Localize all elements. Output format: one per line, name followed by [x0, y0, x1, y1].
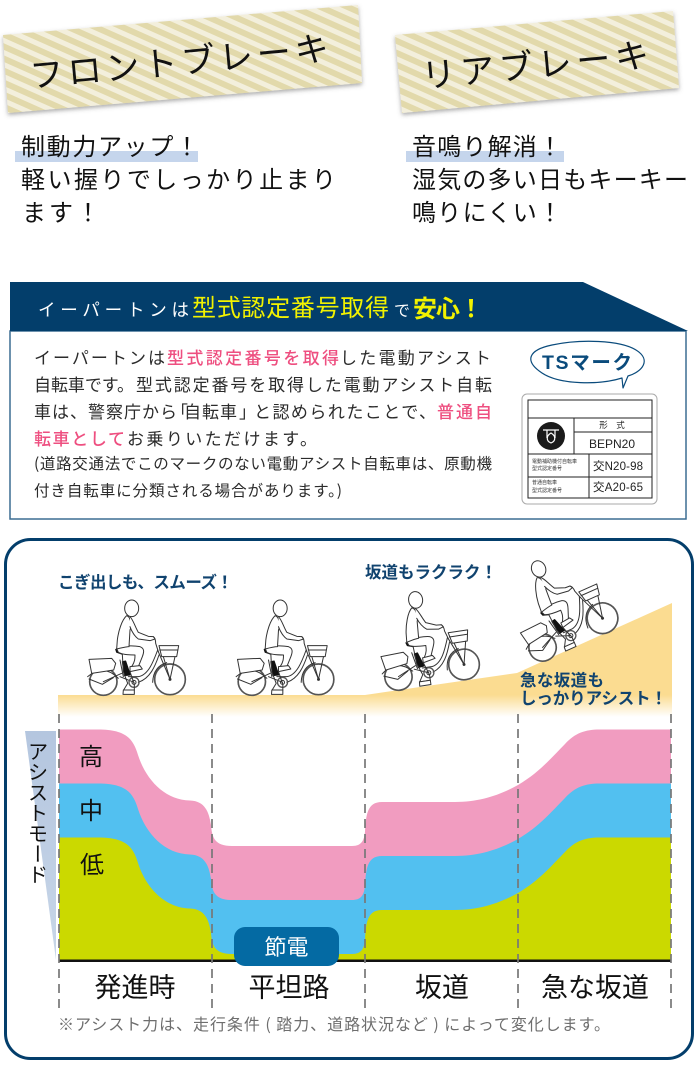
heading: 型式認定番号取得	[192, 288, 389, 323]
axis labels: 平坦路	[248, 966, 330, 1005]
label tape: front brake	[3, 5, 362, 113]
body text: 転車として	[34, 425, 125, 450]
axis labels	[94, 966, 649, 1005]
TS mark sticker: 電動補助機付自転車	[532, 458, 577, 465]
speech bubble: TS mark: TSマーク	[542, 352, 632, 374]
heading: イーパートンは	[38, 297, 189, 322]
heading: で	[394, 297, 410, 321]
label tape: rear brake: リアブレーキ	[419, 28, 651, 98]
panel: rear brake	[395, 11, 688, 228]
illustration: rider at start	[88, 600, 185, 695]
body text: 型式認定番号を取得した電動アシスト自転	[136, 371, 492, 396]
highlight: rear brake	[406, 151, 564, 162]
TS mark sticker: 交A20-65	[593, 481, 643, 494]
axis: assist mode: アシストモード	[23, 741, 53, 884]
badge: power saving	[234, 927, 339, 966]
badge: power saving: 節電	[264, 930, 309, 962]
heading: 安心！	[413, 289, 483, 324]
callout: slope: 坂道もラクラク！	[365, 559, 497, 583]
panel: front brake	[3, 5, 362, 228]
panel: type approval	[10, 282, 688, 519]
emblem	[537, 422, 565, 450]
body text: 「	[171, 398, 188, 423]
highlight: front brake	[15, 151, 198, 162]
axis: assist mode	[23, 731, 56, 960]
label tape: front brake: フロントブレーキ	[27, 21, 331, 98]
body text: 型式認定番号を取得	[167, 344, 339, 369]
body text: お乗りいただけます。	[127, 425, 317, 450]
panel: assist mode	[6, 540, 692, 1058]
speech bubble: TS mark	[531, 341, 644, 388]
TS mark sticker: BEPN20	[589, 437, 635, 451]
body text	[34, 344, 492, 501]
callout: start: こぎ出しも、スムーズ！	[58, 569, 233, 593]
band: middle	[59, 784, 671, 960]
label tape: rear brake	[395, 11, 679, 113]
panel border	[10, 331, 686, 519]
body text: (道路交通法でこのマークのない電動アシスト自転車は、原動機	[34, 452, 492, 474]
callout: steep slope: しっかりアシスト！	[520, 685, 667, 709]
body text: 自転車です。	[34, 371, 134, 396]
TS mark sticker: 普通自転車	[532, 479, 557, 486]
axis labels: 坂道	[415, 966, 469, 1005]
body text: 自転車	[184, 398, 237, 423]
level labels: 高	[79, 737, 103, 772]
body text: 付き自転車に分類される場合があります。)	[34, 479, 342, 501]
level labels: 中	[79, 791, 103, 826]
TS mark sticker: 型式認定番号	[532, 487, 562, 494]
text: front brake description	[21, 127, 336, 228]
band: low	[59, 838, 671, 960]
callout: steep slope	[520, 667, 667, 709]
road slope	[58, 603, 672, 717]
TS mark sticker: 形 式	[599, 420, 625, 430]
body text: と認められたことで、	[254, 398, 436, 423]
text: front brake description: ます！	[22, 193, 100, 228]
axis labels: 急な坂道	[541, 966, 649, 1005]
text: rear brake description	[412, 127, 688, 228]
text: rear brake description: 音鳴り解消！	[412, 127, 562, 162]
body text: 車は、警察庁から	[34, 398, 177, 423]
illustration: rider on flat road	[236, 600, 334, 695]
band: high	[59, 730, 671, 960]
TS mark sticker: 交N20-98	[593, 460, 643, 473]
callout: steep slope: 急な坂道も	[520, 667, 604, 691]
illustration: rider on steep slope	[495, 540, 623, 666]
text: rear brake description: 湿気の多い日もキーキー	[412, 160, 688, 195]
header band	[10, 282, 688, 331]
body text: 普通自	[437, 398, 492, 423]
text: front brake description: 制動力アップ！	[21, 127, 199, 162]
illustration: rider on slope	[371, 584, 482, 692]
text: rear brake description: 鳴りにくい！	[412, 193, 562, 228]
chart: assist level bands	[59, 730, 671, 960]
footnote: ※アシスト力は、走行条件 ( 踏力、道路状況など ) によって変化します。	[58, 1011, 610, 1035]
body text: 」	[239, 398, 256, 423]
level labels: 低	[80, 845, 104, 880]
TS mark sticker: 型式認定番号	[532, 465, 562, 472]
chart baseline	[59, 960, 671, 962]
heading	[38, 288, 483, 324]
text: front brake description: 軽い握りでしっかり止まり	[21, 160, 336, 195]
body text: イーパートンは	[34, 344, 165, 369]
TS mark sticker	[522, 394, 657, 504]
level labels	[79, 737, 104, 880]
body text: した電動アシスト	[340, 344, 491, 369]
axis labels: 発進時	[94, 966, 176, 1005]
